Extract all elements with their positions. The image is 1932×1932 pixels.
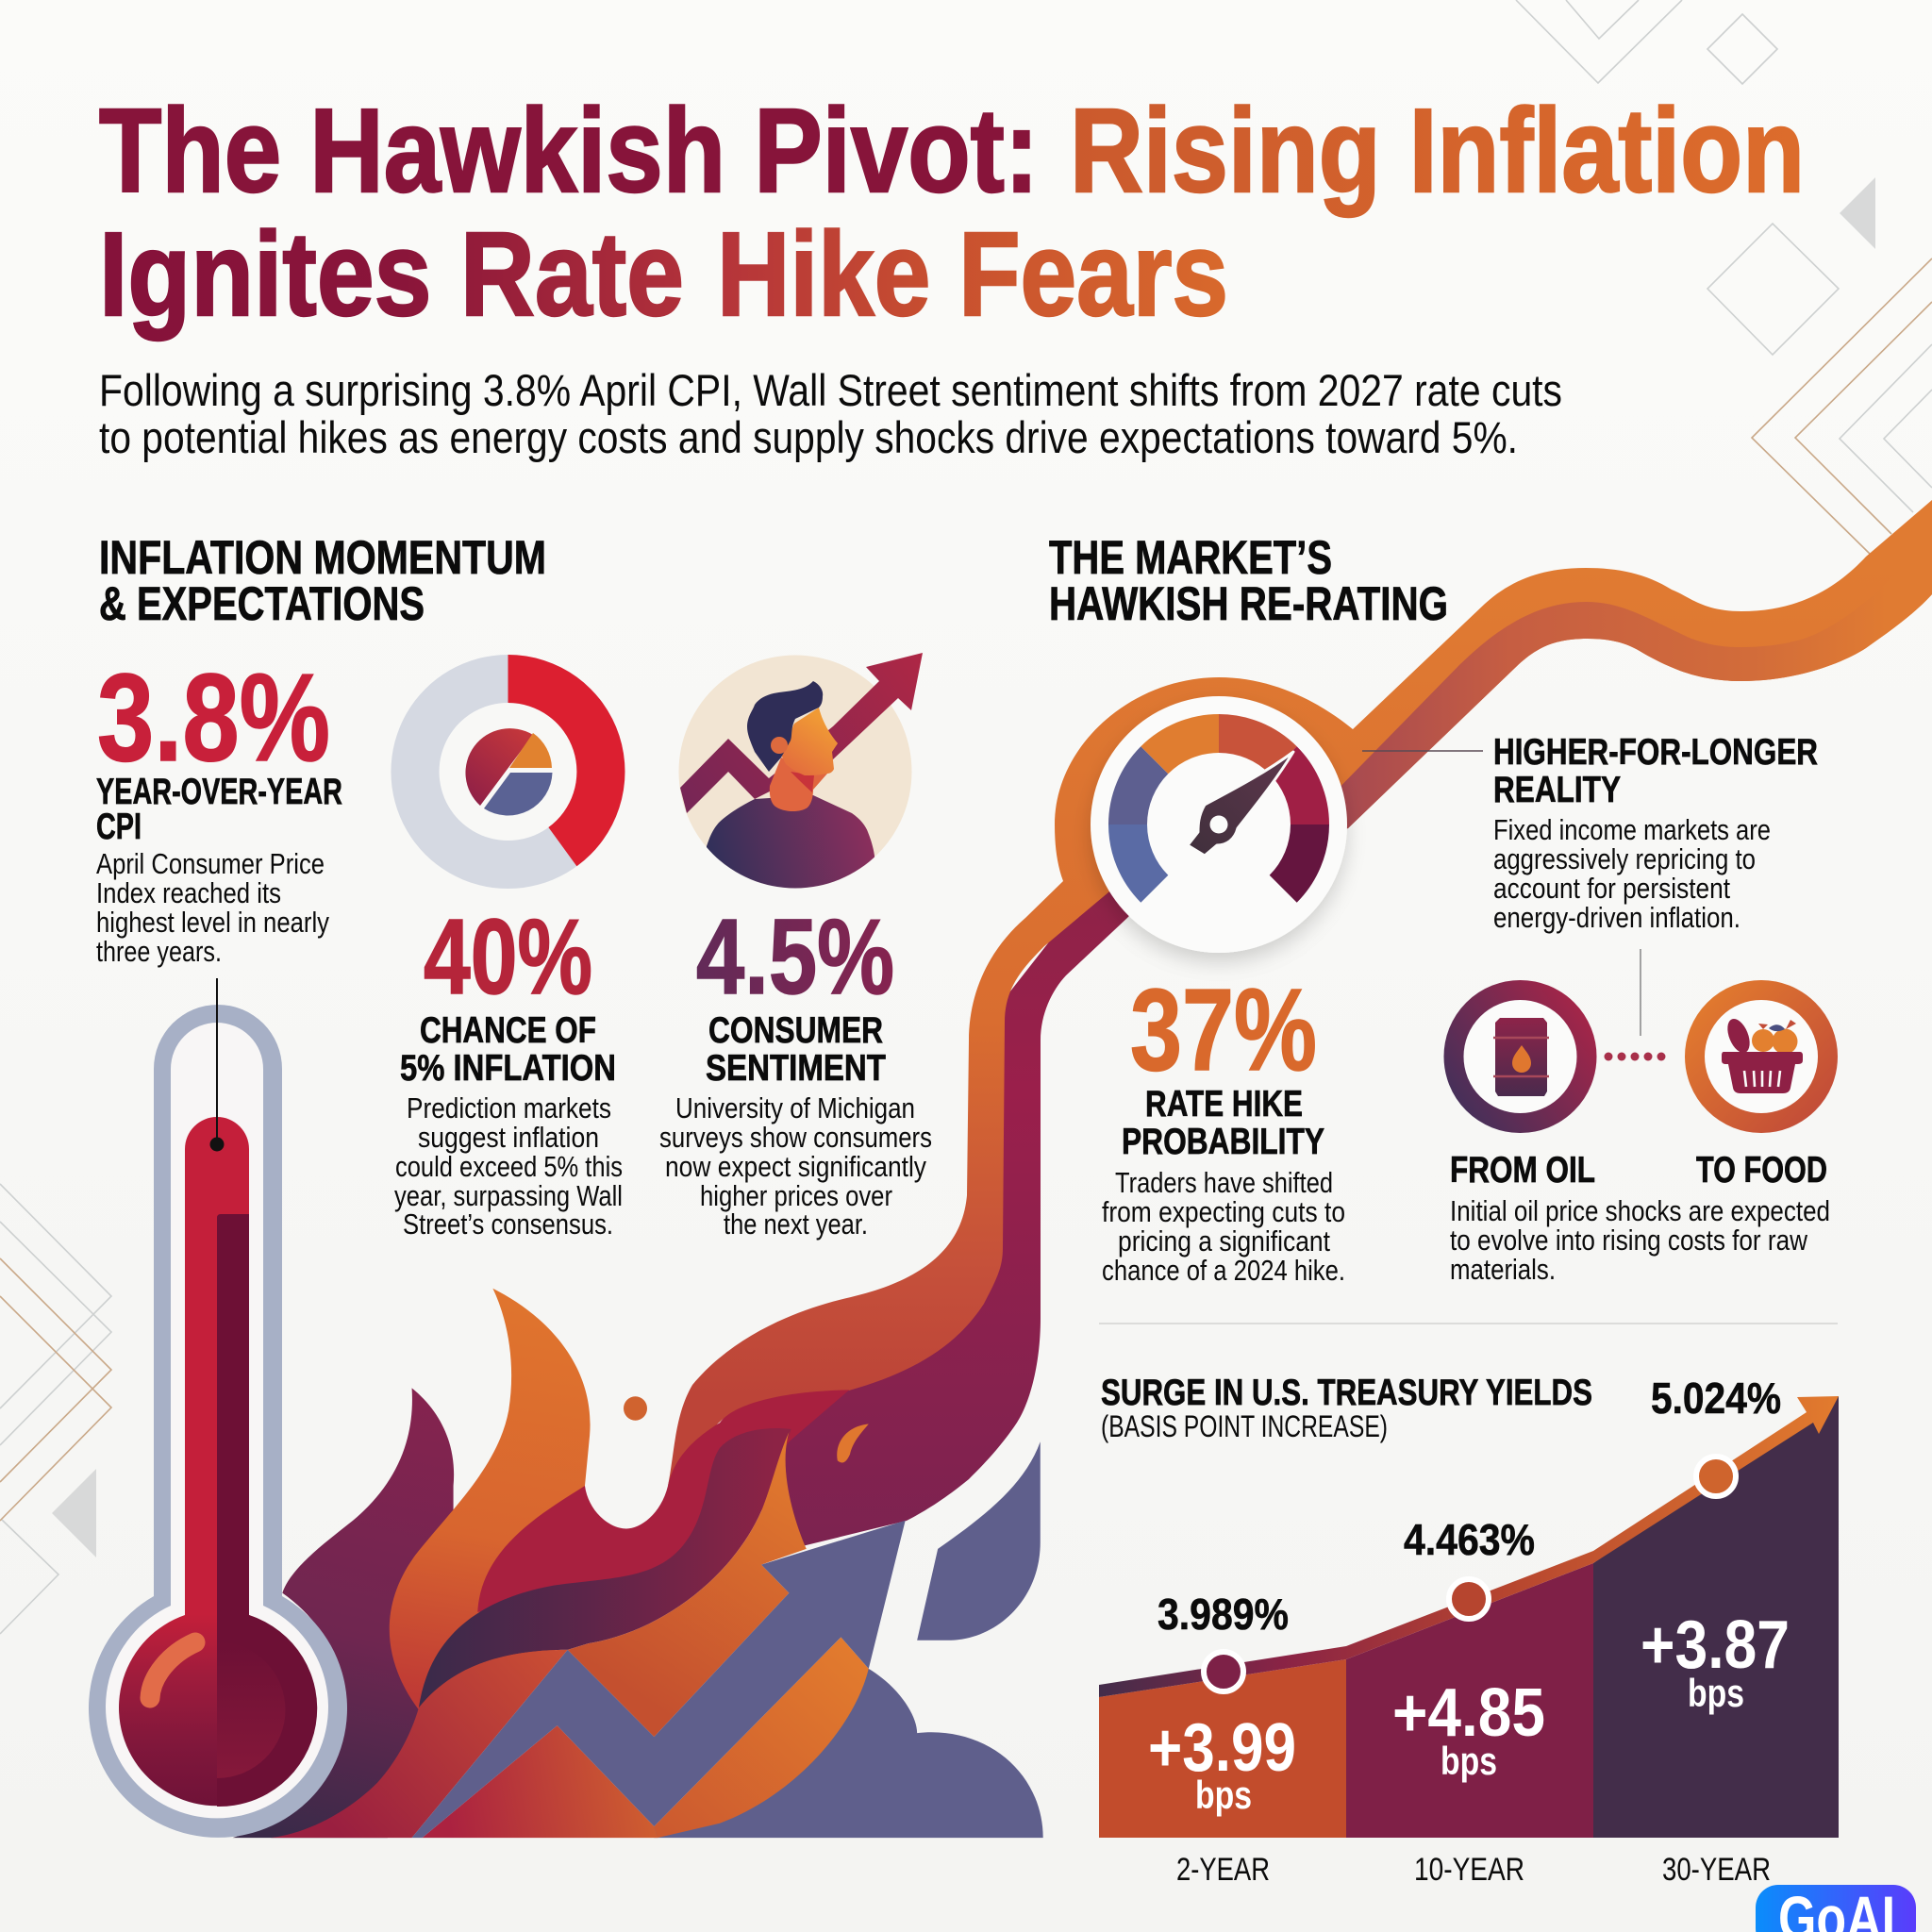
value: 2-year: bps [1195, 1773, 1252, 1817]
leaves [1758, 1020, 1796, 1029]
heading: market re-rating [1049, 531, 1448, 630]
stat: 3.8%: CPI [96, 807, 142, 847]
icon: food basket [1694, 991, 1828, 1123]
flame: red triangle [423, 1725, 658, 1838]
inner pie: crimson [465, 728, 533, 806]
chin shadow [791, 772, 814, 792]
flame: lower orange [654, 1637, 869, 1838]
flame: dark wave [419, 1428, 791, 1707]
text: from oil to food [1450, 1150, 1830, 1286]
gauge [1091, 696, 1347, 953]
stat: 4.5% sentiment: CONSUMER [708, 1010, 883, 1051]
title: Ignites Rate [99, 208, 684, 341]
stat: 37% rate hike: RATE HIKE [1145, 1084, 1303, 1124]
title: Rising Inflation [1070, 84, 1805, 217]
stat: 40% chance: 5% INFLATION [400, 1048, 616, 1089]
flame: blue cloud [654, 1669, 1043, 1838]
flame: blue leaf [917, 1441, 1041, 1641]
value: 30-year [1641, 1607, 1790, 1715]
bar: 2-year [1099, 1659, 1346, 1838]
neck [770, 758, 827, 811]
value: 30-year: bps [1688, 1671, 1744, 1715]
trend arrow [1099, 1396, 1839, 1697]
stat: 3.8%: YEAR-OVER-YEAR [96, 772, 342, 812]
face [781, 708, 838, 775]
fruit two [1772, 1028, 1798, 1055]
stat: 4.5% sentiment: the next year. [724, 1208, 868, 1241]
dot: 30-year [1696, 1457, 1736, 1496]
stat: 40% chance: suggest inflation [418, 1121, 599, 1154]
stat: 3.8%: three years. [96, 935, 222, 968]
icon: oil barrel [1454, 991, 1587, 1123]
stat: 4.5% sentiment: higher prices over [700, 1179, 892, 1212]
thermometer red column and bulb [119, 1117, 315, 1806]
ribbon: red lower edge [1321, 538, 1932, 840]
dotted connector [1604, 1053, 1666, 1060]
subtitle: to potential hikes as energy costs and supply shocks drive expectations toward 5%. [99, 412, 1518, 462]
oil drop [1512, 1045, 1531, 1073]
stat: 40% chance: year, surpassing Wall [394, 1179, 623, 1212]
thermometer inner [106, 1023, 328, 1818]
heading: inflation momentum: & EXPECTATIONS [99, 577, 425, 630]
heading: inflation momentum: INFLATION MOMENTUM [99, 531, 546, 584]
heading: treasury yields [1101, 1373, 1592, 1443]
stat: 3.8%: highest level in nearly [96, 906, 329, 939]
flame: red lower left [271, 1650, 568, 1838]
pointer line [216, 978, 218, 1144]
stat: 4.5% sentiment [659, 897, 932, 1241]
stat: 4.5% sentiment: surveys show consumers [659, 1121, 932, 1154]
ribbon and flames illustration [233, 500, 1932, 1838]
gauge segments [1108, 714, 1329, 903]
stat: 37% rate hike [1102, 966, 1345, 1287]
title: Hike Fears [717, 208, 1228, 341]
flame: orange [390, 1289, 591, 1709]
heading: market re-rating: THE MARKET’S [1049, 531, 1332, 584]
value: 10-year: bps [1441, 1739, 1497, 1783]
flame: small spark [837, 1424, 869, 1462]
portrait circle [679, 655, 911, 889]
text: higher for longer: account for persistent [1493, 872, 1730, 905]
stat: 3.8%: Index reached its [96, 876, 281, 909]
subtitle: Following a surprising 3.8% April CPI, Wall Street sentiment shifts from 2027 rate cuts [99, 365, 1562, 415]
person figure [706, 681, 875, 889]
stat: 37% rate hike: pricing a significant [1118, 1224, 1330, 1257]
heading: market re-rating: HAWKISH RE-RATING [1049, 577, 1448, 630]
stat: 37% rate hike: PROBABILITY [1122, 1122, 1324, 1162]
yield label: 10-year: 4.463% [1404, 1515, 1535, 1564]
inner pie: orange [509, 733, 552, 768]
pointer dot [209, 1138, 225, 1151]
flames [233, 1289, 1043, 1838]
chart: 40% donut [391, 655, 625, 889]
bar: 30-year [1593, 1396, 1839, 1838]
text: from oil to food: TO FOOD [1696, 1150, 1827, 1191]
text: from oil to food: to evolve into rising costs for raw [1450, 1224, 1808, 1257]
dot: 10-year [1449, 1579, 1489, 1619]
chart: treasury yields [1099, 1374, 1839, 1888]
heading: treasury yields: (BASIS POINT INCREASE) [1101, 1409, 1388, 1443]
axis label: 10-year: 10-YEAR [1414, 1852, 1524, 1888]
arrow: blue zigzag [412, 1521, 906, 1838]
barrel body [1495, 1018, 1547, 1096]
stat: 3.8%: 3.8% [97, 648, 330, 787]
inner pie: blue [484, 773, 553, 816]
value: 10-year [1392, 1675, 1545, 1783]
bulb highlight [150, 1642, 195, 1698]
text: higher for longer: energy-driven inflation. [1493, 901, 1740, 934]
fruit [1752, 1029, 1774, 1052]
flame: crimson [477, 1390, 849, 1612]
heading: inflation momentum [99, 531, 546, 630]
value: 2-year: +3.99 [1148, 1710, 1296, 1786]
gauge needle [1188, 752, 1293, 856]
text: from oil to food: FROM OIL [1450, 1150, 1595, 1191]
ember droplet [624, 1396, 647, 1421]
bulb inner lobe [217, 1641, 285, 1778]
callout line [1362, 750, 1483, 752]
text: higher for longer [1493, 732, 1818, 934]
connector line [1640, 949, 1641, 1036]
stat: 40% chance: CHANCE OF [420, 1010, 596, 1051]
flame: plum [233, 1388, 454, 1838]
stat: 3.8% [96, 648, 342, 968]
thermometer [89, 978, 347, 1838]
donut red segment [508, 655, 625, 866]
thermometer dark column [217, 1214, 317, 1807]
barrel bands [1493, 1038, 1549, 1076]
text: from oil to food: Initial oil price shocks are expected [1450, 1194, 1830, 1227]
axis label: 30-year: 30-YEAR [1662, 1852, 1771, 1888]
heading: treasury yields: SURGE IN U.S. TREASURY YIELDS [1101, 1373, 1592, 1413]
needle hub [1209, 815, 1228, 834]
stat: 4.5% sentiment: SENTIMENT [706, 1048, 886, 1089]
stat: 4.5% sentiment: 4.5% [696, 897, 894, 1016]
yield label: 30-year: 5.024% [1651, 1374, 1781, 1423]
stat: 4.5% sentiment: University of Michigan [675, 1091, 915, 1124]
value: 2-year [1148, 1710, 1296, 1817]
stat: 40% chance: 40% [424, 897, 592, 1016]
title [99, 84, 1805, 341]
stat: 37% rate hike: Traders have shifted [1115, 1166, 1333, 1199]
stat: 37% rate hike: chance of a 2024 hike. [1102, 1254, 1345, 1287]
axis label: 2-year: 2-YEAR [1176, 1852, 1270, 1888]
ribbon: crimson band [775, 811, 1226, 1549]
stat: 37% rate hike: from expecting cuts to [1102, 1195, 1345, 1228]
bar: 10-year [1346, 1563, 1593, 1838]
value: 30-year: +3.87 [1641, 1607, 1790, 1683]
subtitle [99, 365, 1562, 462]
stat: 40% chance: Street’s consensus. [403, 1208, 613, 1241]
value: 10-year: +4.85 [1392, 1675, 1545, 1751]
hair [747, 681, 823, 772]
icon: consumer with rising arrow [679, 653, 923, 906]
stat: 37% rate hike: 37% [1130, 966, 1317, 1095]
basket slats [1744, 1071, 1780, 1087]
donut track [391, 655, 625, 889]
shoulders [706, 795, 875, 889]
basket [1722, 1052, 1803, 1093]
leaf blue [1769, 1024, 1785, 1031]
ear [771, 737, 788, 754]
flame: orange wedge [568, 1432, 807, 1737]
stat: 40% chance: could exceed 5% this [395, 1150, 623, 1183]
stat: 3.8%: April Consumer Price [96, 847, 325, 880]
text: from oil to food: materials. [1450, 1253, 1556, 1286]
text: higher for longer: aggressively repricing to [1493, 842, 1756, 875]
gauge dial [1091, 696, 1347, 953]
stat: 4.5% sentiment: now expect significantly [665, 1150, 926, 1183]
title: The Hawkish Pivot: [99, 84, 1039, 217]
stat: 40% chance: Prediction markets [407, 1091, 611, 1124]
thermometer glass [89, 1005, 347, 1838]
bread [1724, 1016, 1754, 1056]
text: higher for longer: Fixed income markets are [1493, 813, 1771, 846]
arrow zigzag [680, 653, 923, 813]
ribbon: orange band [668, 500, 1932, 1486]
dot: 2-year [1204, 1652, 1243, 1691]
stat: 40% chance [394, 897, 623, 1241]
text: higher for longer: REALITY [1493, 770, 1621, 810]
yield label: 2-year: 3.989% [1158, 1590, 1289, 1639]
text: higher for longer: HIGHER-FOR-LONGER [1493, 732, 1818, 773]
